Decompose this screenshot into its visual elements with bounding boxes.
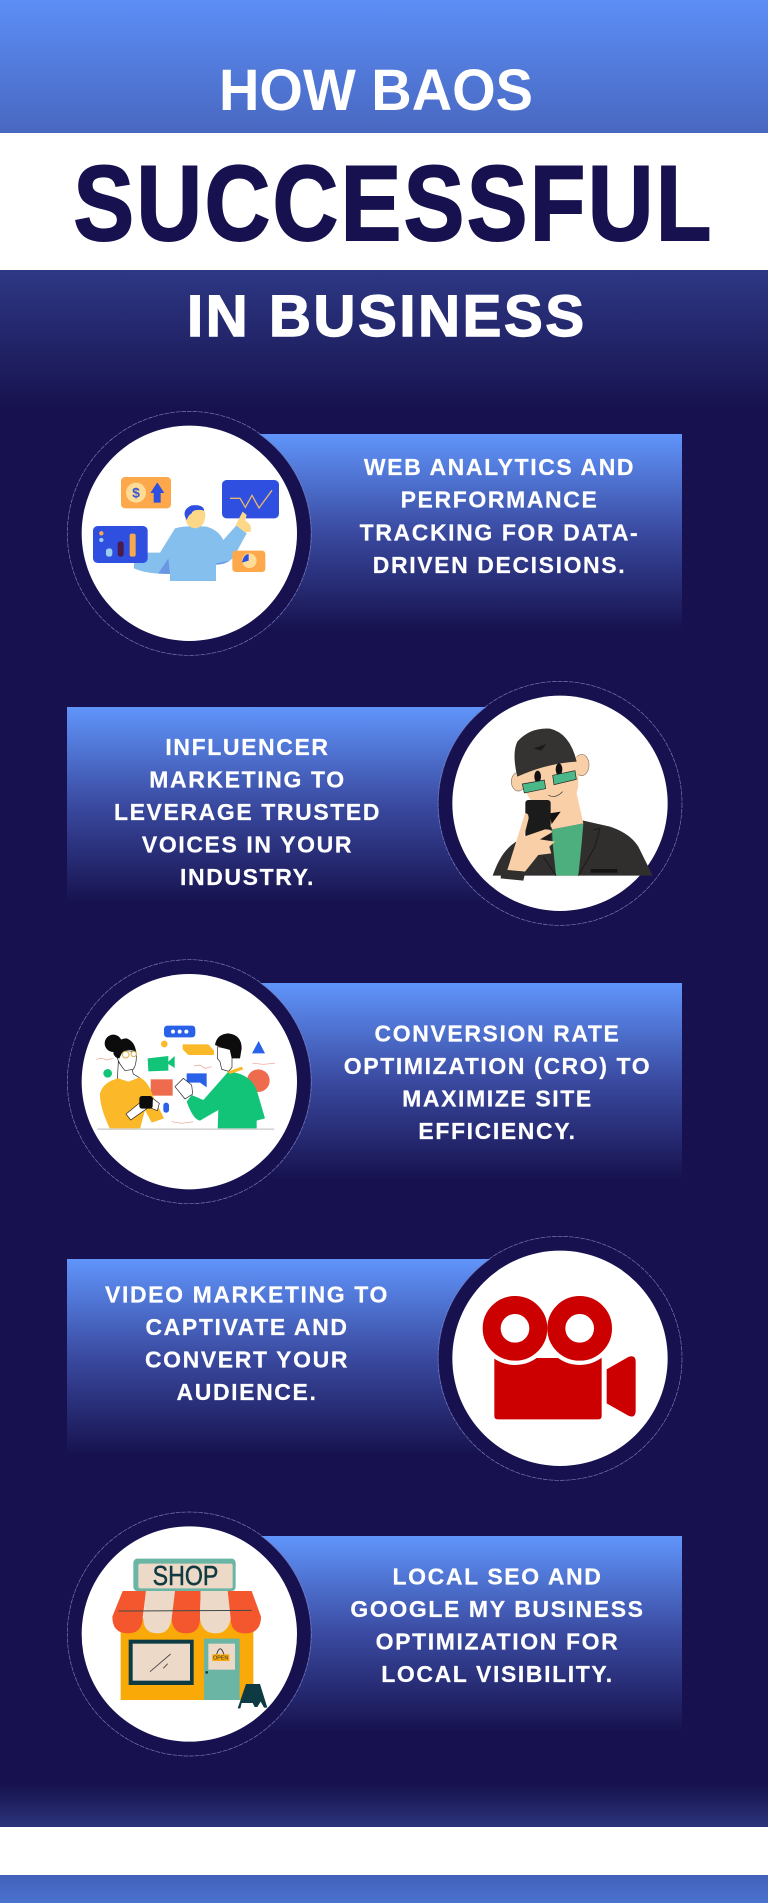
text: video marketing: CAPTIVATE AND: [145, 1314, 349, 1340]
text: local seo: OPTIMIZATION FOR: [376, 1628, 619, 1654]
panel: web analytics: [67, 411, 682, 655]
circle 5: [67, 1512, 311, 1756]
banner 3: [190, 983, 682, 1179]
icon: shop front: OPEN: [213, 1656, 228, 1662]
text: conversion rate: EFFICIENCY.: [418, 1118, 577, 1144]
icon: shop front: SHOP: [153, 1560, 218, 1591]
text: web analytics: DRIVEN DECISIONS.: [373, 552, 626, 578]
circle 1: [67, 411, 311, 655]
text: video marketing: [105, 1282, 389, 1405]
text: web analytics: WEB ANALYTICS AND: [364, 454, 635, 480]
panel: conversion rate optimization: [67, 960, 682, 1204]
text: conversion rate: MAXIMIZE SITE: [402, 1086, 593, 1112]
title: successful: SUCCESSFUL: [74, 144, 714, 264]
icon: two people talking: [96, 1026, 275, 1130]
icon: analytics person: $: [132, 485, 140, 501]
panel: influencer marketing: [67, 681, 682, 925]
title band: [0, 133, 768, 270]
text: influencer marketing: INDUSTRY.: [180, 864, 315, 890]
circle 2: [438, 681, 682, 925]
title: how baos: HOW BAOS: [219, 58, 533, 123]
text: influencer marketing: VOICES IN YOUR: [142, 832, 353, 858]
banner 5: [190, 1536, 682, 1732]
circle 3: [67, 960, 311, 1204]
text: local seo: [350, 1564, 645, 1687]
panel: video marketing: [67, 1236, 682, 1480]
text: influencer marketing: MARKETING TO: [149, 766, 346, 792]
icon: video camera: [478, 1292, 636, 1419]
icon: analytics person: [93, 477, 279, 581]
text: influencer marketing: LEVERAGE TRUSTED: [114, 799, 381, 825]
banner 4: [67, 1259, 557, 1455]
footer gradient: [0, 1785, 768, 1903]
banner 1: [190, 434, 682, 630]
text: conversion rate: [344, 1020, 651, 1144]
text: conversion rate: OPTIMIZATION (CRO) TO: [344, 1053, 651, 1079]
panel: local seo: [67, 1512, 682, 1756]
text: web analytics: PERFORMANCE: [401, 487, 598, 513]
text: web analytics: [360, 454, 639, 578]
icon: influencer with phone: [493, 729, 653, 881]
text: web analytics: TRACKING FOR DATA-: [360, 519, 639, 545]
text: influencer marketing: INFLUENCER: [165, 734, 330, 760]
footer white band: [0, 1827, 768, 1875]
text: local seo: LOCAL VISIBILITY.: [381, 1661, 614, 1687]
circle 4: [438, 1236, 682, 1480]
title: in business: IN BUSINESS: [187, 284, 584, 349]
text: video marketing: AUDIENCE.: [177, 1379, 317, 1405]
text: video marketing: VIDEO MARKETING TO: [105, 1282, 389, 1308]
text: influencer marketing: [114, 734, 381, 890]
banner 2: [67, 707, 557, 903]
icon: shop front: [112, 1559, 267, 1708]
text: local seo: LOCAL SEO AND: [393, 1564, 602, 1590]
text: local seo: GOOGLE MY BUSINESS: [350, 1596, 645, 1622]
text: conversion rate: CONVERSION RATE: [375, 1020, 620, 1046]
header gradient: [0, 0, 768, 408]
text: video marketing: CONVERT YOUR: [145, 1346, 349, 1372]
